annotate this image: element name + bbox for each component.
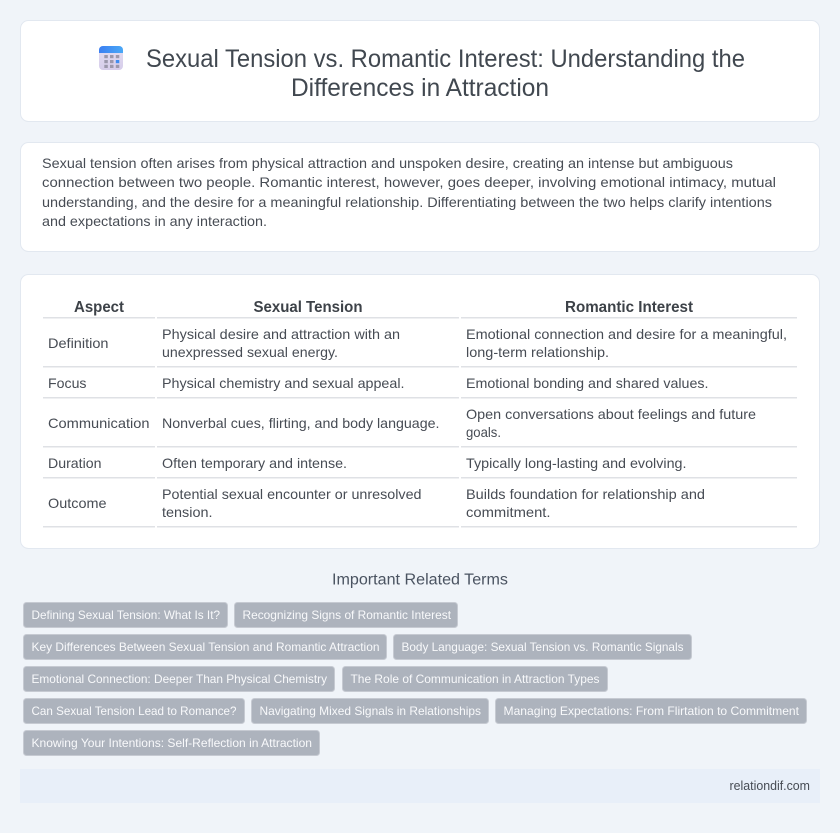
title [146,45,745,102]
row: duration [48,455,686,471]
title: Sexual Tension vs. Romantic Interest: Understanding the [146,45,745,73]
table header: Sexual Tension [254,299,362,316]
panel: related term tags [24,602,806,756]
text block: intro: understanding, and the desire for a meaningful relationship. Differentiating between the two helps clarify intentions [42,194,772,210]
row: communication: Nonverbal cues, flirting, and body language. [162,415,440,431]
tag: Managing Expectations: From Flirtation to Commitment [504,704,800,718]
row: duration: Often temporary and intense. [162,455,347,471]
heading: related terms: Important Related Terms [332,572,508,588]
text block: intro: Sexual tension often arises from physical attraction and unspoken desire, creating an intense but ambiguous [42,155,733,171]
text block: intro: connection between two people. Romantic interest, however, goes deeper, involving emotional intimacy, mutual [42,174,776,190]
text block: intro [42,155,776,229]
tag: Body Language: Sexual Tension vs. Romantic Signals [402,640,684,654]
row: duration: Typically long-lasting and evolving. [466,455,686,471]
tag [24,666,334,692]
tag [24,602,228,628]
tag [394,634,692,660]
row: definition [48,326,787,360]
table header: Aspect [74,299,124,316]
row: communication: Open conversations about feelings and future [466,406,756,422]
row: outcome: Builds foundation for relationship and [466,486,705,502]
footer [20,769,820,803]
row: communication: goals. [466,424,501,440]
row: definition: Physical desire and attraction with an [162,326,400,342]
footer source text: relationdif.com [730,779,810,793]
row: definition: Definition [48,335,108,351]
row: definition: long-term relationship. [466,344,609,360]
row: focus: Focus [48,375,86,391]
tag [24,634,386,660]
text block: intro: and expectations in any interaction. [42,213,267,229]
row: outcome: Potential sexual encounter or unresolved [162,486,422,502]
row: communication: Communication [48,415,150,431]
tag [252,698,488,724]
tag: The Role of Communication in Attraction Types [350,672,600,686]
tag [496,698,806,724]
row: definition: Emotional connection and desire for a meaningful, [466,326,787,342]
tag [24,730,320,756]
tag [24,698,244,724]
tag: Knowing Your Intentions: Self-Reflection in Attraction [32,736,312,750]
panel: intro paragraph [20,142,820,252]
tag: Defining Sexual Tension: What Is It? [32,608,220,622]
tag: Can Sexual Tension Lead to Romance? [32,704,237,718]
row: outcome: commitment. [466,504,550,520]
row: outcome [48,486,705,520]
panel: title header [20,20,820,122]
table header: Romantic Interest [565,299,693,316]
tag: Key Differences Between Sexual Tension and Romantic Attraction [32,640,380,654]
table header [74,299,693,316]
row: focus: Emotional bonding and shared values. [466,375,708,391]
row: definition: unexpressed sexual energy. [162,344,338,360]
panel: comparison table [20,274,820,548]
row: communication [48,406,756,440]
row: focus [48,375,708,391]
row: duration: Duration [48,455,102,471]
icon: calendar [99,46,123,70]
tag [234,602,458,628]
tag: Recognizing Signs of Romantic Interest [242,608,452,622]
tag: Emotional Connection: Deeper Than Physical Chemistry [32,672,327,686]
row: outcome: tension. [162,504,212,520]
title: Differences in Attraction [291,74,549,102]
tag [342,666,608,692]
row: outcome: Outcome [48,495,107,511]
tag: Navigating Mixed Signals in Relationships [260,704,481,718]
row: focus: Physical chemistry and sexual appeal. [162,375,404,391]
